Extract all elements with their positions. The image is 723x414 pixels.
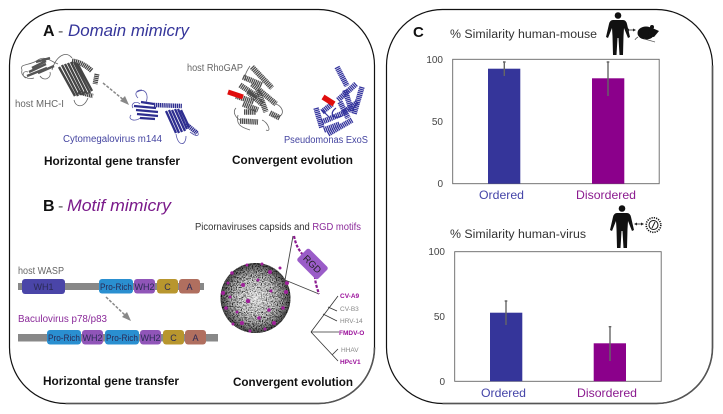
protein: host MHC-I: [21, 54, 97, 106]
bar chart: human-virus: 0: [439, 377, 445, 388]
panel: A and B mimicry: [10, 10, 374, 404]
protein: host RhoGAP: [228, 66, 282, 131]
subheading: horizontal gene transfer A: Horizontal gene transfer: [44, 154, 180, 168]
protein: Pseudomonas ExoS: [316, 67, 362, 134]
bar: ordered: [488, 69, 520, 184]
bar: disordered: [594, 343, 626, 381]
tree: picornavirus phylogeny: HRV-14: [340, 318, 363, 325]
label: host WASP: host WASP: [18, 266, 64, 277]
label: Cytomegalovirus m144: Cytomegalovirus m144: [63, 134, 162, 145]
callout: RGD motif: [285, 236, 329, 294]
domain diagram: host WASP: WH2: [134, 282, 154, 292]
tree: picornavirus phylogeny: CV-B3: [340, 306, 359, 313]
label: disordered: Disordered: [576, 188, 636, 202]
bar: disordered: [592, 78, 624, 184]
chart title: human-virus: % Similarity human-virus: [450, 229, 586, 241]
label: disordered: Disordered: [577, 386, 637, 400]
bar chart: human-mouse: 100: [426, 55, 443, 66]
bar chart: human-virus: 100: [428, 247, 445, 258]
tree: picornavirus phylogeny: [311, 293, 364, 366]
heading: A Domain mimicry: A: [43, 23, 55, 40]
domain diagram: host WASP: Pro-Rich: [100, 282, 132, 292]
domain diagram: host WASP: A: [186, 282, 193, 292]
icon: human and virus: [610, 205, 661, 248]
tree: picornavirus phylogeny: FMDV-O: [339, 330, 364, 337]
label: host MHC-I: host MHC-I: [15, 99, 64, 110]
domain diagram: Baculovirus p78/p83: WH2: [82, 333, 102, 343]
icon: human and mouse: [606, 12, 659, 55]
domain diagram: host WASP: C: [164, 282, 171, 292]
domain diagram: host WASP: WH1: [34, 282, 54, 292]
heading: A Domain mimicry: -: [58, 23, 63, 40]
label: Pseudomonas ExoS: Pseudomonas ExoS: [284, 135, 368, 146]
domain diagram: Baculovirus p78/p83: C: [170, 333, 177, 343]
bar chart: human-virus: 50: [434, 312, 445, 323]
heading: B Motif mimicry: B: [43, 198, 55, 215]
domain diagram: Baculovirus p78/p83: Pro-Rich: [106, 333, 138, 343]
subheading: convergent evolution B: Convergent evolution: [233, 375, 353, 389]
domain diagram: host WASP: [18, 279, 204, 294]
caption: picornaviruses capsids: Picornaviruses capsids and RGD motifs: [195, 222, 361, 233]
label: host RhoGAP: host RhoGAP: [187, 63, 243, 74]
icon: capsid sphere: [220, 262, 290, 333]
bar chart: human-mouse: 50: [432, 117, 443, 128]
heading: B Motif mimicry: Motif mimicry: [67, 196, 173, 215]
domain diagram: Baculovirus p78/p83: [18, 330, 218, 344]
error bars: [503, 62, 609, 96]
chart title: human-mouse: % Similarity human-mouse: [450, 29, 597, 41]
arrow: MHC-I to m144: [103, 83, 129, 105]
heading: A Domain mimicry: Domain mimicry: [68, 21, 190, 40]
label: ordered: Ordered: [481, 386, 526, 400]
label: C: C: [413, 24, 424, 41]
subheading: convergent evolution A: Convergent evolution: [232, 153, 353, 167]
tree: picornavirus phylogeny: HPcV1: [340, 359, 361, 366]
heading: B Motif mimicry: -: [58, 198, 63, 215]
subheading: horizontal gene transfer B: Horizontal gene transfer: [43, 374, 179, 388]
callout: RGD motif: RGD: [300, 253, 323, 276]
domain diagram: Baculovirus p78/p83: WH2: [140, 333, 160, 343]
protein: Cytomegalovirus m144: [130, 90, 198, 144]
domain diagram: Baculovirus p78/p83: Pro-Rich: [48, 333, 80, 343]
bar: ordered: [490, 313, 522, 381]
panel: C similarity charts: [386, 10, 713, 404]
bar chart: human-mouse: 0: [437, 179, 443, 190]
bar chart: human-virus: [428, 247, 661, 400]
domain diagram: Baculovirus p78/p83: A: [192, 333, 199, 343]
bar chart: human-mouse: [426, 55, 659, 202]
arrow: WASP to p78/p83: [106, 297, 131, 321]
label: ordered: Ordered: [479, 188, 524, 202]
tree: picornavirus phylogeny: CV-A9: [340, 293, 360, 300]
label: Baculovirus p78/p83: Baculovirus p78/p83: [18, 314, 107, 325]
error bars: [505, 301, 611, 361]
tree: picornavirus phylogeny: HHAV: [341, 347, 359, 354]
